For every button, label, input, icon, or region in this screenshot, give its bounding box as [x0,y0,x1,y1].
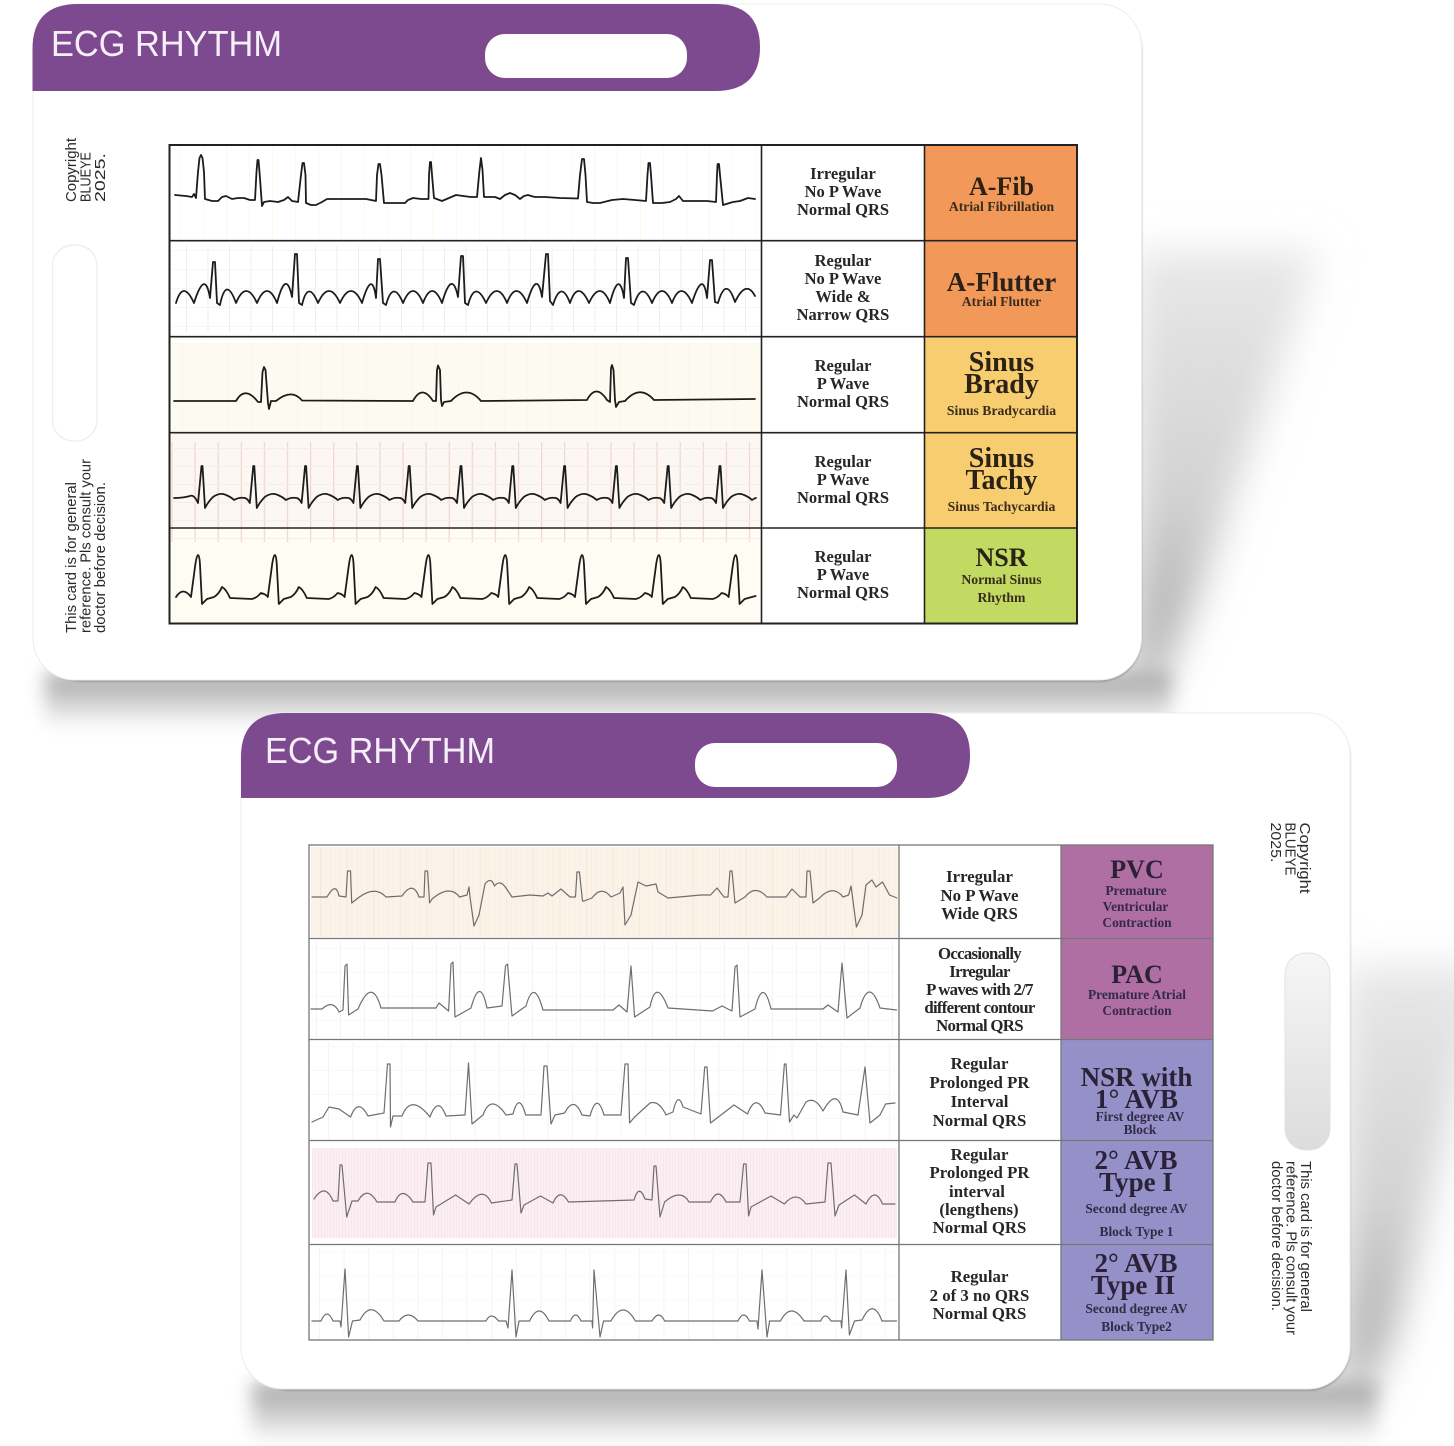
criteria: normal sinus rhythm [797,547,889,602]
label: PVC: Premature [1105,883,1167,898]
criteria: atrial flutter: Regular [815,251,871,270]
label: NSR with first degree AV block: First degree AV [1096,1109,1185,1124]
card body [33,4,1142,680]
criteria: atrial fibrillation: Normal QRS [797,200,889,219]
criteria: PAC: P waves with 2/7 [926,980,1033,999]
colored label cells [1061,845,1213,1340]
ECG trace: PVC [312,871,897,927]
criteria: PAC: Normal QRS [936,1016,1023,1035]
copyright note: 2025. [92,153,109,202]
copyright note [1267,822,1313,894]
colored label cells [924,145,1077,624]
criteria: PVC: Wide QRS [941,904,1018,923]
label: Sinus Brady [947,347,1056,418]
strip backgrounds [311,847,898,1339]
criteria: sinus bradycardia: Normal QRS [797,392,889,411]
disclaimer note: reference. Pls consult your [78,459,94,633]
label: Sinus Tachy: Tachy [965,465,1038,496]
label: PVC [1102,855,1172,930]
label: second degree AV block type I [1085,1145,1188,1239]
criteria: first degree AV block: Interval [951,1092,1009,1111]
criteria: first degree AV block [930,1054,1030,1130]
criteria: sinus bradycardia [797,356,889,411]
header band [241,713,970,798]
criteria: second degree AV block type I: interval [949,1182,1005,1201]
card: top ECG card [32,4,1142,680]
ECG trace: normal sinus rhythm [176,555,756,604]
disclaimer note: doctor before decision. [92,482,109,633]
criteria: sinus tachycardia [797,452,889,507]
label: second degree AV block type II: Type II [1091,1270,1175,1300]
strip backgrounds [171,147,760,623]
criteria: PVC: No P Wave [940,886,1019,905]
table grid [169,145,1077,624]
label: A-Flutter: Atrial Flutter [962,294,1041,309]
criteria: sinus bradycardia: P Wave [817,374,869,393]
label: second degree AV block type II: Block Type2 [1101,1319,1172,1334]
rhythm table: top card [169,145,1077,624]
label: PVC: Contraction [1102,915,1172,930]
criteria: sinus tachycardia: Regular [815,452,871,471]
ECG trace: PAC [311,962,896,1018]
criteria: second degree AV block type II [930,1267,1029,1323]
criteria: first degree AV block: Regular [951,1054,1009,1073]
label: Sinus Brady: Brady [964,369,1039,400]
criteria: first degree AV block: Normal QRS [933,1111,1026,1130]
disclaimer note: doctor before decision. [1268,1161,1285,1311]
label: Sinus Brady: Sinus [969,347,1034,378]
criteria: sinus bradycardia: Regular [815,356,871,375]
criteria: atrial flutter: Wide & [815,287,871,306]
criteria: atrial flutter: Narrow QRS [797,305,889,324]
card: bottom ECG card [241,713,1350,1389]
criteria: atrial flutter [797,251,889,324]
criteria: atrial fibrillation [797,164,889,219]
disclaimer note [63,459,109,633]
label: PAC: Premature Atrial [1088,987,1186,1002]
criteria: second degree AV block type I: Normal QRS [933,1218,1026,1237]
criteria: atrial fibrillation: No P Wave [805,182,881,201]
rhythm table: bottom card [309,845,1213,1340]
label: NSR: NSR [975,543,1028,572]
ECG trace: sinus tachycardia [174,466,756,508]
copyright note [63,137,109,202]
criteria: second degree AV block type I: (lengthens) [939,1200,1019,1219]
label: PAC: Contraction [1102,1003,1172,1018]
label: second degree AV block type II: 2° AVB [1094,1248,1178,1278]
label: second degree AV block type I: 2° AVB [1094,1145,1178,1175]
ECG trace: atrial flutter [176,254,755,305]
ECG trace: second degree AV block type I [314,1163,895,1217]
label: PAC [1088,960,1186,1018]
label: NSR: Normal Sinus [961,572,1042,587]
shadow: bottom card [248,717,1454,1444]
side slot [1285,953,1330,1150]
label: Sinus Tachy [948,443,1055,514]
label: A-Fib: Atrial Fibrillation [949,199,1055,214]
copyright note: Copyright [1296,822,1313,894]
label: second degree AV block type I: Type I [1099,1167,1173,1197]
shadow: top card [40,8,1320,728]
criteria: first degree AV block: Prolonged PR [930,1073,1030,1092]
heading: ECG RHYTHM [51,23,282,64]
header slot [695,743,897,787]
label: NSR with first degree AV block: NSR with [1081,1062,1192,1092]
criteria: normal sinus rhythm: P Wave [817,565,869,584]
header band [32,4,760,91]
copyright note: BLUEYE [78,152,94,202]
disclaimer note: This card is for general [1297,1161,1314,1312]
side slot [52,245,97,441]
label: second degree AV block type II: Second degree AV [1085,1301,1188,1316]
ECG trace: atrial fibrillation [175,155,755,206]
label: Sinus Brady: Sinus Bradycardia [947,403,1056,418]
criteria: normal sinus rhythm: Regular [815,547,871,566]
criteria: second degree AV block type I: Prolonged PR [930,1163,1030,1182]
criteria: PAC: Irregular [949,962,1011,981]
criteria: second degree AV block type I: Regular [951,1145,1009,1164]
ECG trace: second degree AV block type II [312,1269,896,1337]
criteria: second degree AV block type II: 2 of 3 no QRS [930,1286,1029,1305]
label: PAC: PAC [1111,960,1163,989]
label: second degree AV block type II [1085,1248,1188,1334]
criteria: sinus tachycardia: Normal QRS [797,488,889,507]
criteria: second degree AV block type II: Normal QRS [933,1304,1026,1323]
criteria: PVC: Irregular [946,867,1013,886]
criteria: sinus tachycardia: P Wave [817,470,869,489]
table grid [309,845,1213,1340]
copyright note: Copyright [63,137,80,202]
label: A-Fib [949,172,1055,214]
label: NSR: Rhythm [978,590,1026,605]
card body [241,713,1350,1389]
criteria: normal sinus rhythm: Normal QRS [797,583,889,602]
criteria: second degree AV block type II: Regular [951,1267,1009,1286]
label: NSR with first degree AV block: 1° AVB [1095,1084,1178,1114]
label: A-Flutter: A-Flutter [947,267,1056,297]
criteria: PVC [940,867,1019,923]
disclaimer note: reference. Pls consult your [1282,1161,1300,1335]
label: PVC: PVC [1110,855,1164,884]
copyright note: BLUEYE [1282,822,1298,876]
copyright note: 2025. [1267,822,1284,862]
heading: ECG RHYTHM [265,730,495,771]
criteria: atrial fibrillation: Irregular [810,164,876,183]
ECG trace: first degree AV block [312,1063,895,1127]
label: NSR with first degree AV block [1081,1062,1192,1137]
criteria: PAC: Occasionally [938,944,1022,963]
label: second degree AV block type I: Block Type 1 [1100,1224,1173,1239]
ECG trace: sinus bradycardia [174,365,755,409]
label: second degree AV block type I: Second degree AV [1085,1201,1188,1216]
label: PVC: Ventricular [1103,899,1168,914]
label: NSR [961,543,1042,605]
criteria: atrial flutter: No P Wave [805,269,881,288]
label: NSR with first degree AV block: Block [1124,1122,1157,1137]
label: Sinus Tachy: Sinus [969,443,1034,474]
label: Sinus Tachy: Sinus Tachycardia [948,499,1055,514]
header slot [485,34,687,78]
disclaimer note [1268,1161,1314,1335]
label: A-Fib: A-Fib [969,172,1034,201]
criteria: PAC [924,944,1036,1035]
criteria: second degree AV block type I [930,1145,1030,1237]
disclaimer note: This card is for general [63,482,80,633]
criteria: PAC: different contour [924,998,1036,1017]
